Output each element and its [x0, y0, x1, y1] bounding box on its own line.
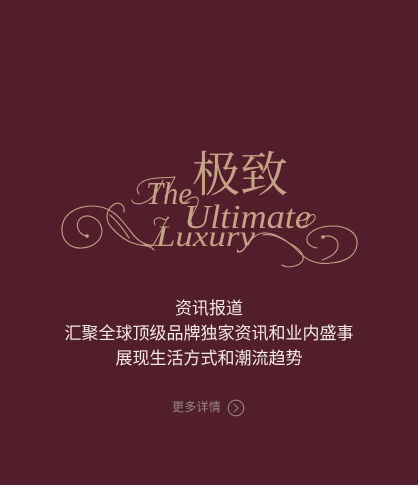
right flourish [248, 226, 357, 267]
left flourish [62, 203, 156, 250]
description text: 汇聚全球顶级品牌独家资讯和业内盛事 [64, 324, 354, 343]
more details link: 更多详情 [172, 400, 221, 414]
icon: circled arrow [228, 400, 244, 416]
logo word: Ultimate: Ultimate [184, 198, 311, 236]
letter swashes [132, 177, 315, 246]
logo heading: 极致: 极致 [192, 136, 288, 205]
description text: 展现生活方式和潮流趋势 [116, 349, 302, 368]
more details link [172, 400, 244, 416]
logo word: The: The [146, 177, 192, 212]
description text [64, 299, 354, 368]
logo word: Luxury: Luxury [155, 219, 256, 253]
description text: 资讯报道 [175, 299, 243, 318]
